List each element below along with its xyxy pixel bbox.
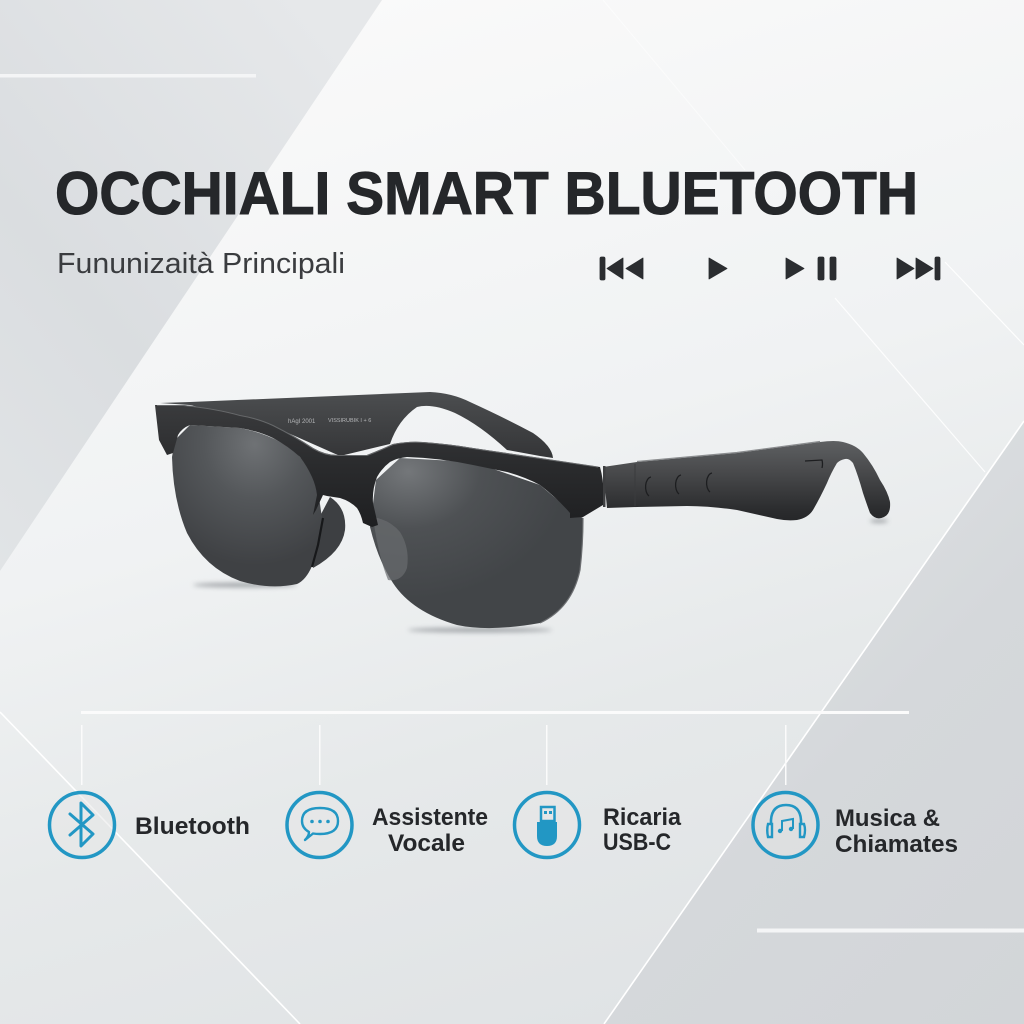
media controls (600, 257, 940, 280)
connector line (319, 725, 320, 785)
rear frame and far temple (160, 392, 553, 458)
icon: speech bubble (287, 792, 352, 858)
label: Bluetooth (135, 813, 250, 840)
feature: Musica e Chiamate (753, 725, 958, 858)
label: Ricaria (603, 804, 682, 831)
label: USB-C (603, 829, 671, 856)
lens rim (540, 518, 583, 623)
imprint text on inner frame: VISSIRUBIK I + 6 (328, 418, 371, 424)
temple buttons (635, 460, 822, 506)
connector line (546, 725, 548, 785)
temple highlight (637, 442, 820, 462)
imprint text on inner frame: hAgI 2001 (288, 419, 316, 425)
icon: usb drive (514, 792, 580, 858)
nose pad far (313, 497, 345, 568)
temple arm (603, 441, 890, 520)
nose pad edge (312, 518, 323, 567)
title: OCCHIALI SMART BLUETOOTH (55, 160, 918, 227)
icon: next track (897, 257, 940, 280)
connector line (785, 725, 786, 785)
feature: Assistente Vocale (287, 725, 488, 858)
right lens (370, 458, 583, 628)
subtitle: Fununizaità Principali (57, 248, 345, 280)
icon: bluetooth (50, 792, 114, 858)
lens inner reflection (373, 517, 408, 580)
feature: Ricarica USB-C (514, 725, 682, 858)
lens shadows (193, 519, 888, 632)
label: Assistente (372, 804, 488, 831)
label: Vocale (388, 830, 465, 857)
feature: Bluetooth (50, 725, 250, 858)
label: Chiamates (835, 831, 958, 858)
connector line (81, 725, 82, 785)
icon: headphones with music note (753, 792, 818, 858)
sunglasses product image (155, 392, 890, 632)
front frame (155, 405, 604, 527)
label: Musica & (835, 805, 940, 832)
icon: play pause (786, 257, 836, 280)
frame highlight (157, 406, 598, 467)
icon: play (709, 258, 727, 279)
front to temple hinge (603, 466, 606, 507)
icon: previous track (600, 257, 643, 280)
left lens (172, 425, 322, 586)
divider line (81, 711, 909, 714)
